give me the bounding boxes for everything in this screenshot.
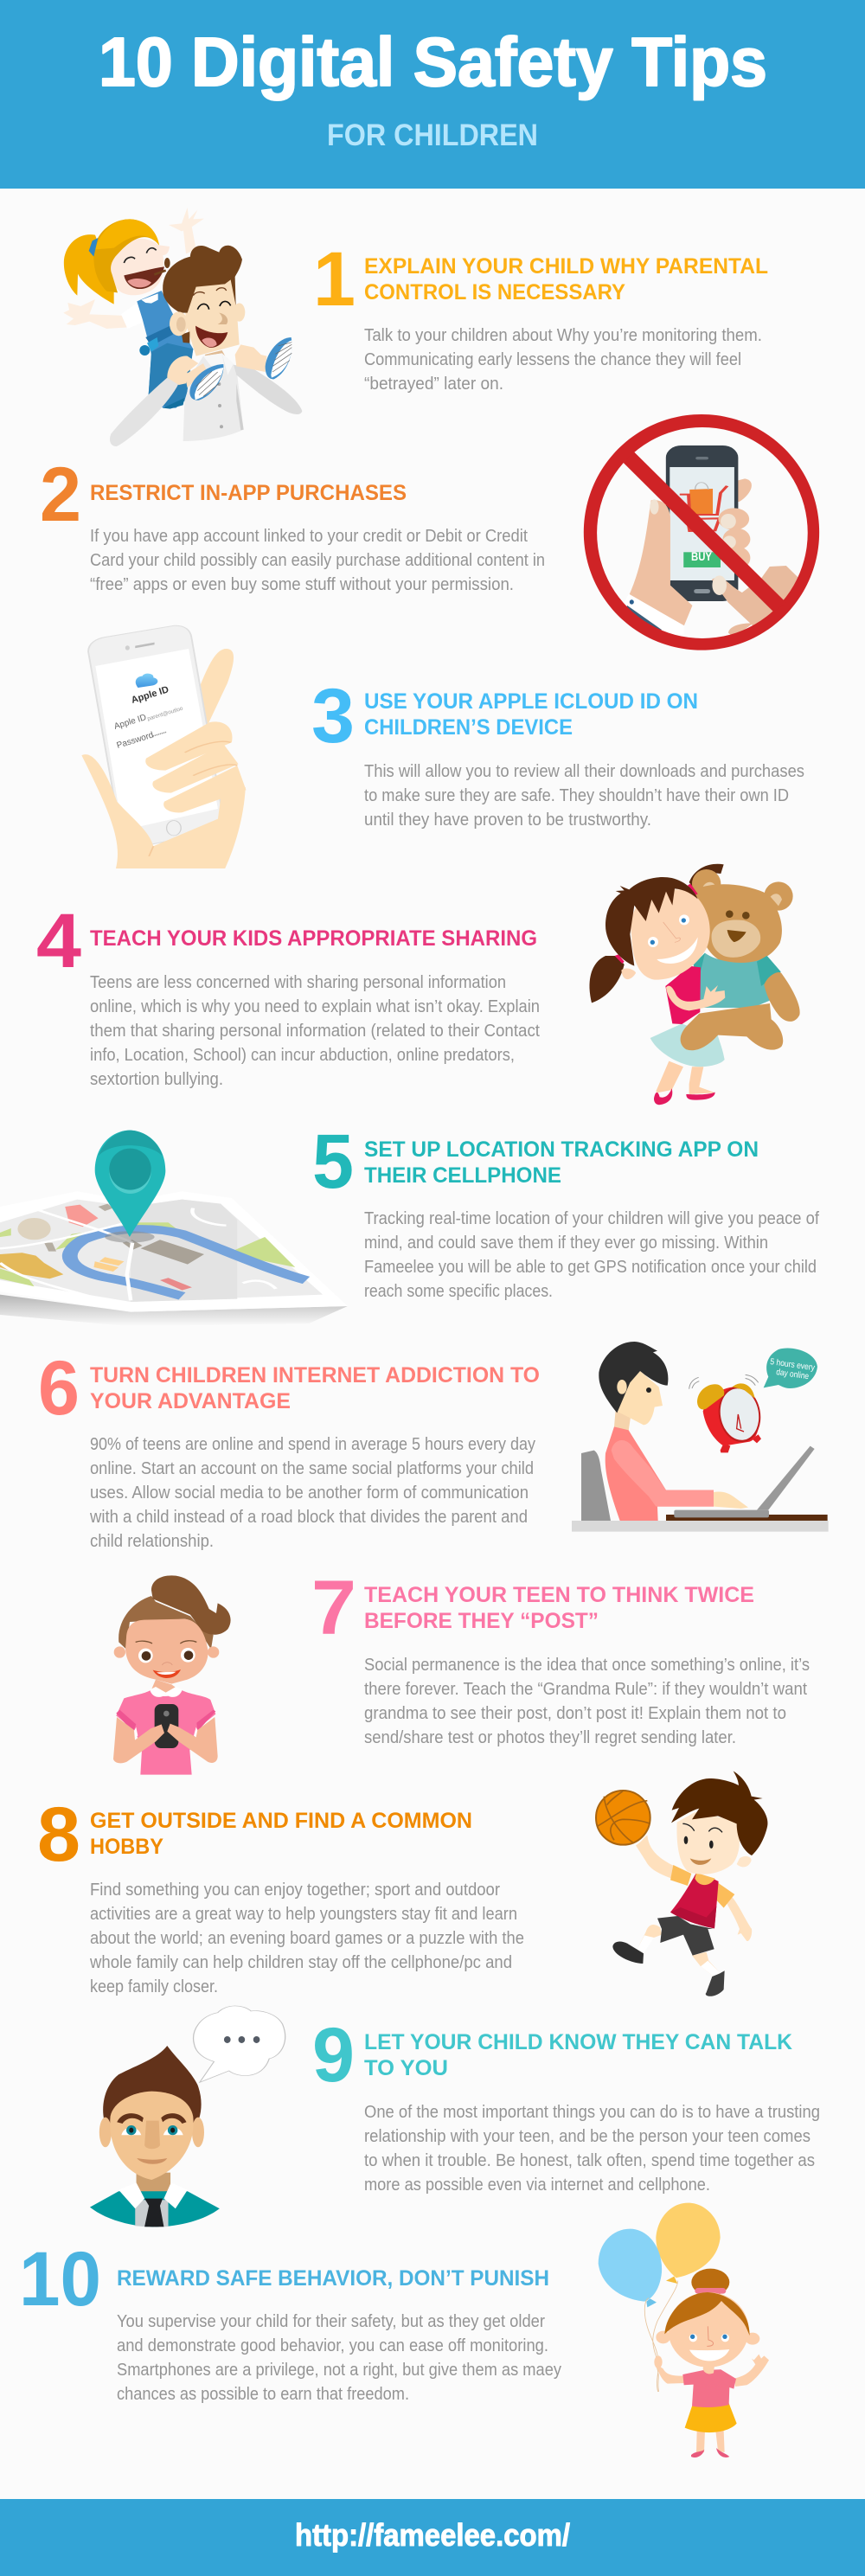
number 9: 9	[312, 2011, 355, 2098]
body text: them that sharing personal information (related to their Contact	[90, 1022, 540, 1041]
body text: more as possible even via internet and cellphone.	[364, 2176, 710, 2195]
body text: chances as possible to earn that freedom.	[117, 2385, 409, 2404]
body text: until they have proven to be trustworthy.	[364, 811, 651, 830]
screen text: Apple ID	[130, 684, 170, 706]
heading: REWARD SAFE BEHAVIOR, DON’T PUNISH	[117, 2266, 549, 2291]
number 3: 3	[311, 672, 355, 759]
heading: EXPLAIN YOUR CHILD WHY PARENTAL	[364, 254, 768, 279]
heading: GET OUTSIDE AND FIND A COMMON	[90, 1809, 472, 1833]
illustration: phone in hand with Apple ID screen: Apple ID	[113, 713, 148, 732]
heading: TEACH YOUR KIDS APPROPRIATE SHARING	[90, 926, 537, 951]
heading: TO YOU	[364, 2056, 448, 2080]
illustration: teen girl with phone	[113, 1575, 231, 1775]
body text: child relationship.	[90, 1532, 214, 1551]
heading: TURN CHILDREN INTERNET ADDICTION TO	[90, 1363, 540, 1387]
heading: USE YOUR APPLE ICLOUD ID ON	[364, 689, 698, 714]
heading: LET YOUR CHILD KNOW THEY CAN TALK	[364, 2030, 792, 2054]
heading: CHILDREN’S DEVICE	[364, 715, 573, 740]
heading: RESTRICT IN-APP PURCHASES	[90, 481, 407, 505]
body text: One of the most important things you can do is to have a trusting	[364, 2103, 820, 2122]
body text: to when it trouble. Be honest, talk often, spend time together as	[364, 2151, 815, 2170]
illustration: phone in hand with Apple ID screen	[81, 625, 246, 868]
panel: tip 4	[36, 864, 800, 1105]
header banner	[0, 0, 865, 189]
body text: Fameelee you will be able to get GPS notification once your child	[364, 1258, 817, 1277]
panel: tip 1	[63, 208, 768, 446]
subtitle: FOR CHILDREN	[327, 119, 538, 152]
body text: about the world; an evening board games or a puzzle with the	[90, 1929, 524, 1948]
body text: uses. Allow social media to be another form of communication	[90, 1483, 529, 1503]
illustration: phone in hand with Apple ID screen: Password	[116, 731, 155, 751]
panel: tip 7	[113, 1564, 810, 1775]
illustration: girl hugging teddy bear	[589, 864, 800, 1105]
illustration: child at laptop with alarm clock: day online	[776, 1368, 810, 1381]
panel: tip 3	[81, 625, 804, 868]
body text: If you have app account linked to your credit or Debit or Credit	[90, 527, 528, 546]
body text: You supervise your child for their safety, but as they get older	[117, 2312, 545, 2331]
title: 10 Digital Safety Tips	[99, 23, 767, 100]
heading: SET UP LOCATION TRACKING APP ON	[364, 1137, 759, 1162]
number 1: 1	[313, 235, 356, 322]
speech bubble text: 5 hours every	[770, 1357, 816, 1373]
number 4: 4	[36, 897, 82, 984]
number 10: 10	[19, 2235, 101, 2322]
body text: whole family can help children stay off the cellphone/pc and	[89, 1953, 512, 1972]
body text: Social permanence is the idea that once something’s online, it’s	[364, 1656, 810, 1675]
body text: and demonstrate good behavior, you can ease off monitoring.	[117, 2336, 548, 2355]
heading: YOUR ADVANTAGE	[90, 1389, 291, 1413]
heading: HOBBY	[90, 1835, 163, 1859]
body text: Find something you can enjoy together; sport and outdoor	[90, 1881, 500, 1900]
body text: This will allow you to review all their downloads and purchases	[364, 762, 804, 781]
body text: mind, and could save them if they ever go missing. Within	[364, 1234, 768, 1253]
body text: Smartphones are a privilege, not a right, but give them as maey	[117, 2361, 561, 2380]
body text: keep family closer.	[90, 1977, 218, 1996]
illustration: phone in hand with Apple ID screen: ••••••••	[152, 730, 168, 740]
body text: with a child instead of a road block that divides the parent and	[89, 1508, 528, 1527]
illustration: girl with balloons	[599, 2203, 769, 2457]
number 2: 2	[40, 451, 81, 537]
body text: Card your child possibly can easily purchase additional content in	[90, 551, 545, 570]
heading: TEACH YOUR TEEN TO THINK TWICE	[364, 1583, 754, 1607]
illustration: girl on father's shoulders	[63, 208, 302, 446]
number 8: 8	[37, 1791, 80, 1877]
panel: tip 10	[19, 2203, 769, 2457]
body text: reach some specific places.	[364, 1282, 553, 1301]
body text: Communicating early lessens the chance they will feel	[364, 350, 741, 369]
illustration: map with location pin	[0, 1131, 348, 1326]
body text: “betrayed” later on.	[364, 375, 503, 394]
body text: there forever. Teach the “Grandma Rule”: if they wouldn’t want	[364, 1680, 807, 1699]
illustration: phone in hand with Apple ID screen: parent@outloo	[147, 706, 184, 722]
body text: 90% of teens are online and spend in average 5 hours every day	[90, 1435, 535, 1454]
panel: tip 8	[37, 1771, 768, 1996]
body text: relationship with your teen, and be the person your teen comes	[364, 2127, 811, 2146]
footer banner	[0, 2499, 865, 2576]
illustration: man with speech bubble	[90, 2006, 285, 2227]
body text: online, which is why you need to explain what isn’t okay. Explain	[90, 997, 540, 1016]
body text: info, Location, School) can incur abduction, online predators,	[90, 1046, 515, 1065]
icon: no in-app purchases sign	[584, 414, 819, 650]
panel: tip 5	[0, 1118, 819, 1326]
body text: to make sure they are safe. They shouldn’t have their own ID	[364, 786, 789, 805]
heading: CONTROL IS NECESSARY	[364, 280, 625, 304]
body text: “free” apps or even buy some stuff without your permission.	[90, 575, 514, 594]
body text: activities are a great way to help youngsters stay fit and learn	[90, 1905, 517, 1924]
number 5: 5	[312, 1118, 354, 1204]
heading: THEIR CELLPHONE	[364, 1163, 561, 1188]
website url: http://fameelee.com/	[295, 2517, 570, 2553]
body text: online. Start an account on the same social platforms your child	[90, 1459, 534, 1478]
illustration: boy with basketball	[596, 1771, 768, 1996]
body text: Talk to your children about Why you’re monitoring them.	[364, 326, 762, 345]
panel: tip 6	[38, 1342, 829, 1551]
button label: BUY	[691, 549, 713, 563]
body text: grandma to see their post, don’t post it! Explain them not to	[364, 1704, 786, 1723]
illustration: child at laptop with alarm clock	[572, 1342, 829, 1532]
body text: Teens are less concerned with sharing personal information	[90, 973, 506, 992]
panel: tip 9	[90, 2006, 820, 2227]
body text: Tracking real-time location of your children will give you peace of	[364, 1209, 819, 1228]
heading: BEFORE THEY “POST”	[364, 1609, 599, 1633]
number 6: 6	[38, 1344, 80, 1431]
number 7: 7	[311, 1564, 356, 1650]
panel: tip 2	[40, 414, 819, 650]
body text: sextortion bullying.	[90, 1070, 223, 1089]
body text: send/share test or photos they’ll regret sending later.	[364, 1728, 736, 1747]
